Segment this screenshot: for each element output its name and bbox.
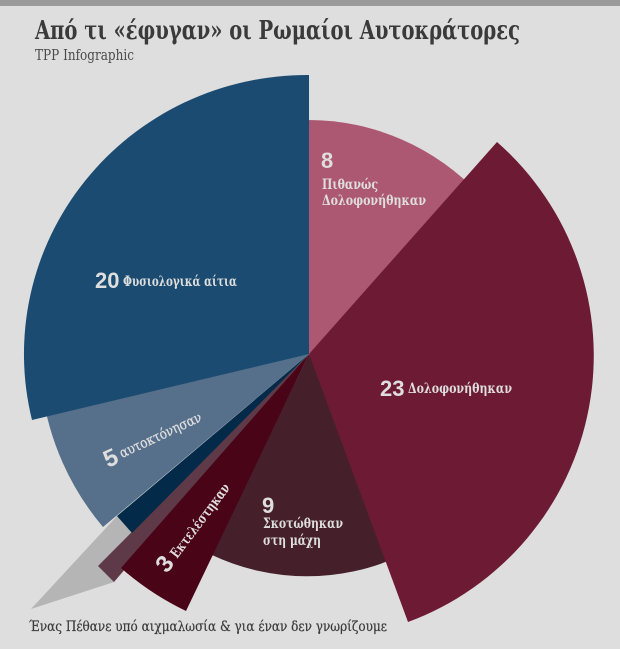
slice: executed (121, 354, 309, 611)
label: 5 suicide (99, 404, 207, 473)
subtitle: TPP Infographic (35, 48, 134, 64)
label: 3 executed: 3 (150, 551, 180, 578)
label: 23 murdered: Δολοφονήθηκαν (408, 381, 512, 397)
slice: unknown fate (grey) (31, 516, 150, 609)
slice: murdered (309, 142, 594, 622)
label: 3 executed (150, 476, 236, 578)
label: 5 suicide: αυτοκτόνησαν (117, 410, 204, 462)
label: 20 natural causes (95, 268, 237, 293)
slice: died in captivity (98, 354, 309, 582)
slice: possibly murdered (309, 120, 480, 354)
label: 9 killed in battle: Σκοτώθηκαν (263, 516, 343, 532)
footnote: Ένας Πέθανε υπό αιχμαλωσία & για έναν δεν γνωρίζουμε (29, 619, 387, 635)
label: 9 killed in battle (262, 493, 343, 549)
slice: natural causes (24, 75, 309, 420)
label: 20 natural causes: Φυσιολογικά αίτια (123, 273, 237, 290)
label: 3 executed: Εκτελέστηκαν (167, 481, 234, 561)
slice: killed in battle (212, 354, 400, 576)
label: 9 killed in battle: 9 (262, 493, 274, 518)
label: 8 possibly murdered: 8 (321, 148, 333, 173)
label: 8 possibly murdered: Δολοφονήθηκαν (322, 193, 426, 209)
label: 8 possibly murdered (321, 148, 426, 209)
label: 23 murdered (380, 376, 512, 401)
slice: suicide (42, 354, 309, 527)
slice: navy sliver (117, 354, 309, 533)
label: 5 suicide: 5 (99, 443, 123, 473)
label: 23 murdered: 23 (380, 376, 404, 401)
label: 9 killed in battle: στη μάχη (263, 533, 321, 549)
label: 8 possibly murdered: Πιθανώς (322, 177, 378, 193)
label: 20 natural causes: 20 (95, 268, 119, 293)
